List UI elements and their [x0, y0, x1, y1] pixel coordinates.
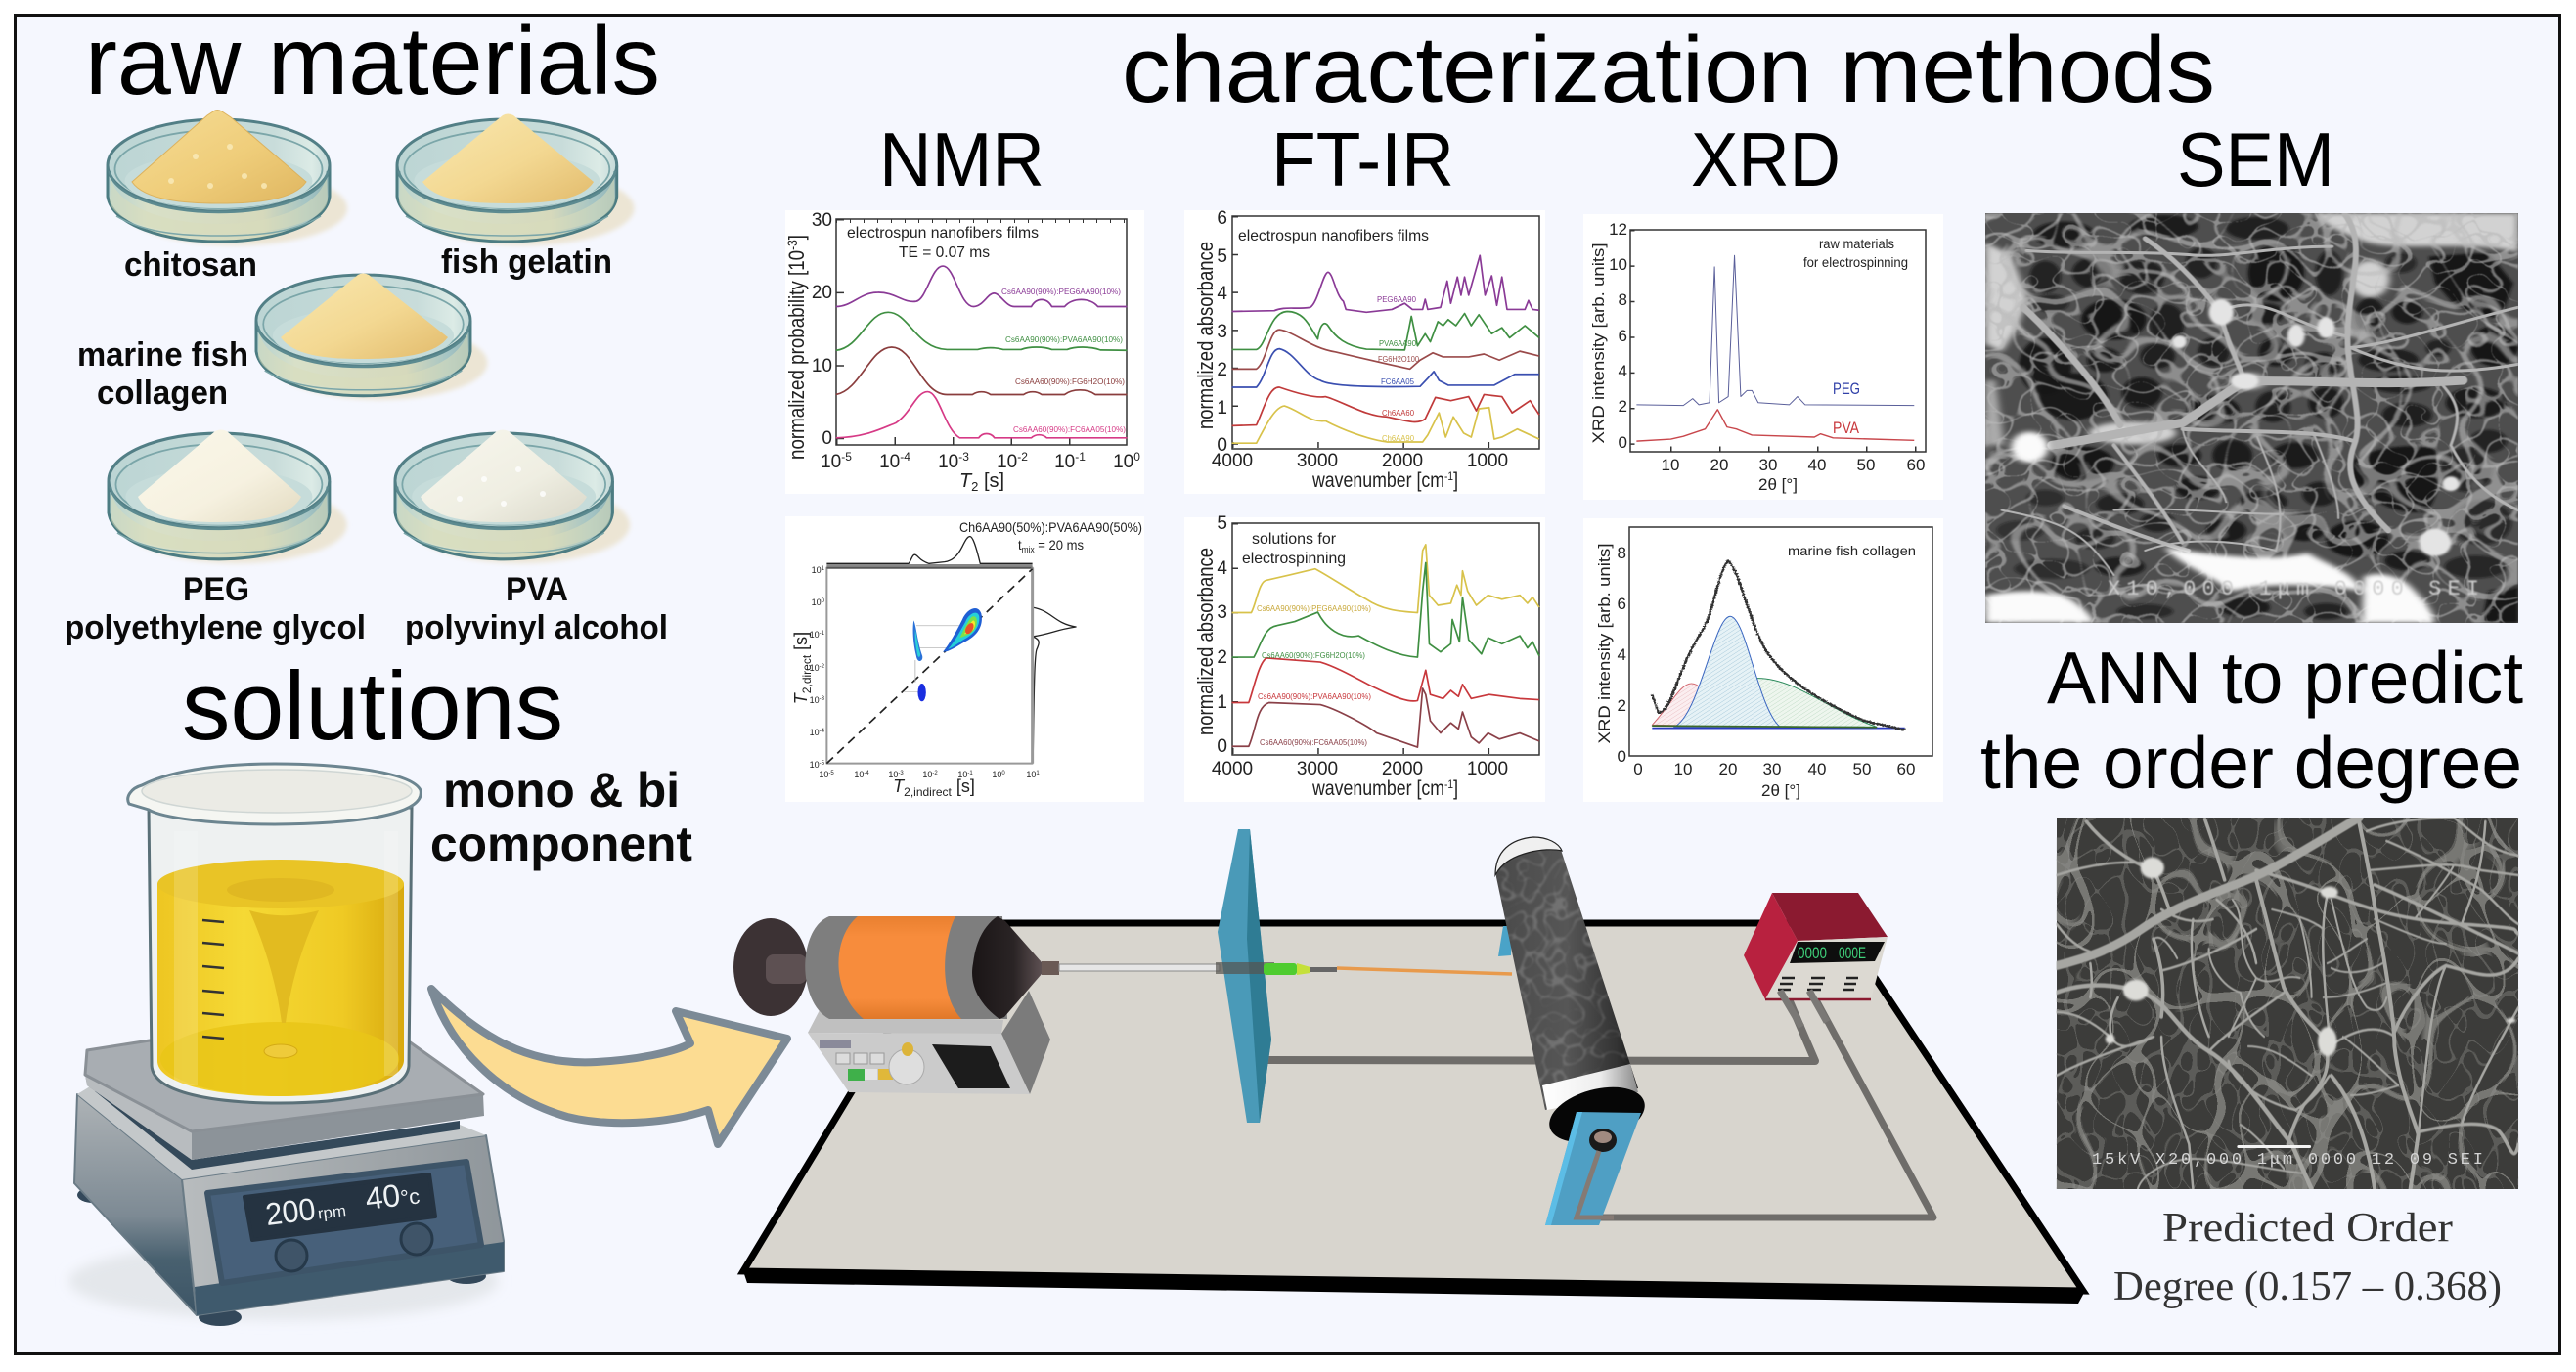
- x tick labels: 10: [821, 452, 841, 472]
- x tick labels: 20: [1719, 760, 1737, 778]
- x tick labels: -4: [864, 771, 869, 776]
- x tick labels: 10: [1662, 456, 1679, 474]
- y tick labels: 2: [1217, 360, 1227, 380]
- y tick labels: -1: [820, 631, 825, 637]
- y tick labels: 1: [1217, 398, 1227, 419]
- current readout: 000E: [1839, 944, 1866, 962]
- voltage readout: 0000: [1798, 944, 1827, 962]
- diagram: electrospinning apparatus: [733, 829, 2084, 1304]
- jet: [1337, 968, 1512, 974]
- x tick labels: 60: [1907, 456, 1925, 474]
- secondary fibre mesh: [2057, 818, 2518, 1189]
- chart: NMR 2D T2-T2 exchange map: [785, 516, 1144, 802]
- scale bar: [2239, 1145, 2310, 1148]
- caption: predicted order degree: [2113, 1206, 2502, 1309]
- y tick labels: 0: [822, 428, 832, 449]
- annotation: raw materials: raw materials: [1819, 236, 1894, 251]
- cross-peak guides: [904, 626, 965, 691]
- y axis title: normalized absorbance: [1193, 548, 1218, 735]
- x tick labels: -4: [900, 450, 910, 464]
- x axis title: T: [959, 470, 973, 492]
- x axis title: 2θ [°]: [1761, 781, 1800, 800]
- label: mono and bi component: component: [430, 817, 692, 871]
- y tick labels: [812, 210, 832, 449]
- heading: XRD: XRD: [1691, 116, 1841, 202]
- y tick labels: 6: [1619, 327, 1627, 345]
- y tick labels: 10: [1609, 255, 1627, 274]
- series labels: FG6H2O100: [1378, 354, 1419, 364]
- y tick labels: 10: [810, 663, 820, 673]
- x tick labels: 3000: [1297, 759, 1338, 779]
- rear collector bracket: [1498, 926, 1512, 956]
- ground wires: [1267, 993, 1933, 1217]
- y tick labels: 10: [810, 760, 820, 770]
- series labels: Cs6AA60(90%):FC6AA05(10%): [1013, 424, 1126, 434]
- x tick labels: 50: [1853, 760, 1871, 778]
- y axis title: XRD intensity [arb. units]: [1589, 243, 1608, 444]
- x tick labels: 60: [1897, 760, 1915, 778]
- y tick labels: 2: [1619, 397, 1627, 416]
- knob left: [276, 1240, 307, 1271]
- y tick labels: 10: [810, 695, 820, 705]
- y tick labels: 10: [812, 597, 822, 607]
- x axis title: ]: [1453, 469, 1458, 492]
- series labels: Cs6AA60(90%):FG6H2O(10%): [1015, 376, 1125, 386]
- caption: predicted order degree: Predicted Order: [2162, 1206, 2453, 1251]
- x tick labels: -5: [841, 450, 852, 464]
- x tick labels: [1633, 760, 1915, 778]
- label: marine fish collagen: collagen: [97, 375, 228, 412]
- x tick labels: -3: [898, 771, 904, 776]
- direction pad: [889, 1049, 924, 1084]
- series labels: PEG6AA90: [1377, 294, 1416, 304]
- y tick labels: 6: [1618, 595, 1626, 613]
- x tick labels: 2000: [1382, 759, 1423, 779]
- small peak: [917, 684, 926, 701]
- x axis title: [s]: [952, 776, 975, 796]
- y tick labels: 30: [812, 210, 832, 231]
- light regions: [1985, 213, 2518, 445]
- x tick labels: 0: [1633, 760, 1643, 778]
- annotation: electrospinning: electrospinning: [1242, 551, 1346, 567]
- keypad: [836, 1053, 884, 1064]
- label: PEG polyethylene glycol: polyethylene glycol: [65, 609, 366, 646]
- title: characterization methods: characterization methods: [1122, 18, 2215, 122]
- label: PVA polyvinyl alcohol: PVA: [506, 571, 568, 608]
- y tick labels: 0: [1217, 435, 1227, 456]
- platform: [743, 923, 2084, 1304]
- y tick labels: 5: [1217, 513, 1227, 534]
- series labels: Cs6AA90(90%):PEG6AA90(10%): [1257, 603, 1371, 613]
- title: raw materials: raw materials: [85, 7, 660, 114]
- x tick labels: -2: [1017, 450, 1028, 464]
- chart: NMR T2 distributions: [784, 210, 1144, 494]
- syringe pump control box: [808, 991, 1050, 1094]
- annotation: for electrospinning: for electrospinning: [1803, 254, 1908, 270]
- x tick labels: 30: [1763, 760, 1781, 778]
- chart: XRD raw materials: [1583, 214, 1943, 500]
- x axis title: -1: [1444, 777, 1453, 791]
- y tick labels: 2: [1618, 696, 1626, 715]
- y tick labels: 8: [1618, 544, 1626, 562]
- nozzle: [1042, 961, 1059, 975]
- x tick labels: 10: [879, 452, 900, 472]
- x tick labels: 1000: [1467, 759, 1508, 779]
- y tick labels: 2: [1217, 647, 1227, 668]
- y tick labels: 1: [1217, 692, 1227, 713]
- x tick labels: 1000: [1467, 451, 1508, 471]
- panel: raw material dishes: [65, 110, 668, 646]
- y tick labels: [1217, 208, 1227, 456]
- x tick labels: 10: [888, 770, 898, 779]
- x tick labels: 40: [1808, 456, 1826, 474]
- y tick labels: -2: [820, 664, 825, 670]
- x tick labels: 10: [997, 452, 1017, 472]
- micrograph caption: 15kV X20,000 1μm 0000 12 09 SEI: [2092, 1151, 2483, 1170]
- y tick labels: 6: [1217, 208, 1227, 229]
- annotation: electrospun nanofibers films: [847, 225, 1039, 242]
- micrograph caption: X10,000 1μm 0000 SEI: [2108, 577, 2479, 601]
- title: solutions: solutions: [182, 651, 563, 760]
- y axis title: -3: [784, 240, 800, 250]
- syringe barrel: [805, 916, 1042, 1019]
- pump screen: [932, 1044, 1010, 1088]
- chart: FT-IR solutions for electrospinning: [1184, 513, 1545, 802]
- x tick labels: [819, 770, 1040, 779]
- y tick labels: 4: [1619, 362, 1627, 380]
- heading: ANN to predict the order degree: the order degree: [1980, 722, 2522, 804]
- mixing time annotation: t: [1018, 537, 1022, 553]
- collector roller: [1494, 836, 1645, 1141]
- barcode: [820, 1040, 851, 1048]
- annotation: electrospun nanofibers films: [1238, 228, 1429, 244]
- y tick labels: [1609, 220, 1627, 452]
- x tick labels: [1212, 451, 1508, 471]
- spinneret: [1264, 963, 1337, 975]
- x axis title: 2,indirect: [904, 785, 952, 799]
- fibre coating: [1500, 851, 1637, 1104]
- roller end: [1543, 1078, 1651, 1152]
- x tick labels: 10: [938, 452, 958, 472]
- label: mono and bi component: mono & bi: [443, 763, 680, 818]
- display: 200 rpm: [263, 1187, 347, 1232]
- y tick labels: -3: [820, 696, 825, 702]
- x tick labels: [1662, 456, 1925, 474]
- x axis title: -1: [1444, 469, 1453, 483]
- series labels: [1001, 287, 1126, 434]
- x tick labels: 0: [1001, 771, 1005, 776]
- series label: PEG: PEG: [1833, 379, 1860, 398]
- y tick labels: -5: [820, 761, 825, 767]
- x axis title: 2: [971, 479, 978, 494]
- y tick labels: 0: [1618, 747, 1626, 766]
- chart: XRD marine fish collagen: [1583, 518, 1943, 802]
- y tick labels: 4: [1618, 645, 1626, 664]
- x tick labels: -3: [958, 450, 969, 464]
- y tick labels: 4: [1217, 558, 1227, 579]
- annotation: solutions for: solutions for: [1252, 531, 1337, 548]
- cone: [972, 916, 1042, 1019]
- display: 200 rpm: 200: [263, 1191, 317, 1232]
- label: marine fish collagen: marine fish: [77, 336, 248, 374]
- image: SEM micrograph 10,000x: [1985, 213, 2518, 623]
- label: PVA polyvinyl alcohol: polyvinyl alcohol: [405, 609, 668, 646]
- heading: NMR: NMR: [879, 116, 1044, 202]
- diffractograms: [1636, 255, 1914, 441]
- y axis title: 2,direct: [800, 654, 814, 693]
- mixing time annotation: mix: [1022, 545, 1035, 554]
- x tick labels: -1: [967, 771, 973, 776]
- diagonal: [826, 569, 1033, 764]
- y axis title: [s]: [791, 632, 811, 655]
- orange band: [838, 916, 961, 1019]
- icon: beaker with yellow solution: [128, 764, 421, 1103]
- x tick labels: 10: [854, 770, 864, 779]
- y tick labels: 12: [1609, 220, 1627, 239]
- yellow knob: [902, 1042, 913, 1056]
- label: fish gelatin: fish gelatin: [441, 243, 612, 281]
- x axis title: 2θ [°]: [1758, 475, 1798, 494]
- x axis title: ]: [1453, 777, 1458, 800]
- x tick labels: [1212, 759, 1508, 779]
- icon: fish gelatin dish: [397, 113, 635, 245]
- y tick labels: [1217, 513, 1227, 757]
- arrow: solution to electrospinning: [431, 989, 787, 1144]
- plunger disc: [733, 918, 808, 1016]
- x tick labels: 40: [1808, 760, 1826, 778]
- roller top cap: [1495, 837, 1562, 875]
- fine fibre mesh: [1985, 213, 2518, 623]
- y tick labels: 5: [1217, 246, 1227, 267]
- off-diagonal peak: [913, 620, 922, 661]
- y tick labels: 10: [810, 728, 820, 737]
- series labels: Ch6AA90: [1382, 433, 1414, 443]
- blue plate: [1216, 829, 1274, 1123]
- label: mono and bi component: [430, 763, 692, 871]
- x tick labels: 10: [819, 770, 828, 779]
- y tick labels: 3: [1217, 602, 1227, 623]
- series labels: PVA6AA90: [1379, 338, 1416, 348]
- x tick labels: 3000: [1297, 451, 1338, 471]
- x tick labels: 10: [1113, 452, 1133, 472]
- plunger rod: [766, 954, 807, 984]
- x tick labels: 20: [1710, 456, 1728, 474]
- image: SEM micrograph 20,000x: [2057, 818, 2518, 1189]
- y axis title: normalized absorbance: [1193, 242, 1218, 429]
- y tick labels: [1618, 544, 1626, 766]
- x tick labels: 4000: [1212, 759, 1253, 779]
- series labels: Cs6AA60(90%):FG6H2O(10%): [1262, 650, 1365, 660]
- y tick labels: 10: [812, 565, 822, 575]
- bright nodes: [2172, 299, 2460, 556]
- heading: ANN to predict the order degree: ANN to predict: [2047, 637, 2523, 719]
- stirrer feet: [77, 1187, 486, 1326]
- main peak contours: [943, 608, 982, 652]
- x tick labels: 2000: [1382, 451, 1423, 471]
- y tick labels: 0: [822, 598, 825, 604]
- series labels: FC6AA05: [1381, 376, 1414, 386]
- x axis title: T: [893, 776, 906, 796]
- label: marine fish collagen: [77, 336, 248, 412]
- x axis title: wavenumber [cm: [1312, 469, 1469, 492]
- series labels: Cs6AA90(90%):PEG6AA90(10%): [1001, 287, 1121, 296]
- series label: PVA: PVA: [1833, 419, 1860, 437]
- series labels: Cs6AA90(90%):PVA6AA90(10%): [1005, 334, 1123, 344]
- annotation: marine fish collagen: [1788, 543, 1916, 558]
- charged bright areas: [1985, 432, 2435, 623]
- x tick labels: -1: [1075, 450, 1086, 464]
- x tick labels: 10: [1026, 770, 1036, 779]
- projections: [826, 537, 1033, 563]
- display: 40 C: 40°c: [363, 1174, 422, 1217]
- fibre network: [2002, 214, 2518, 575]
- collector bracket: [1545, 1112, 1641, 1225]
- chart: FT-IR electrospun nanofibers films: [1184, 208, 1545, 494]
- cable stubs: [1780, 991, 1827, 1027]
- exchange-map annotation: Ch6AA90(50%):PVA6AA90(50%): [959, 519, 1142, 535]
- icon: chitosan dish: [108, 110, 347, 245]
- icon: magnetic stirrer hot plate: [68, 1040, 504, 1326]
- x tick labels: -2: [932, 771, 938, 776]
- series labels: Ch6AA60: [1382, 408, 1414, 418]
- icon: marine fish collagen dish: [256, 274, 487, 400]
- label: PEG polyethylene glycol: [65, 571, 366, 646]
- heading: SEM: SEM: [2177, 116, 2334, 202]
- display: 200 rpm: rpm: [317, 1203, 347, 1223]
- spectra: [1232, 545, 1539, 747]
- y tick labels: [810, 565, 825, 770]
- icon: PEG dish: [109, 430, 347, 563]
- x tick labels: 10: [1054, 452, 1075, 472]
- panel switches: [1778, 978, 1858, 990]
- label: PVA polyvinyl alcohol: [405, 571, 668, 646]
- x tick labels: 1: [1036, 771, 1040, 776]
- series labels: [1377, 294, 1419, 443]
- liquid: [157, 884, 404, 1096]
- y tick labels: 8: [1619, 290, 1627, 309]
- x tick labels: 10: [922, 770, 932, 779]
- x tick labels: 50: [1857, 456, 1875, 474]
- y tick labels: -4: [820, 729, 825, 734]
- heading: ANN to predict the order degree: [1980, 637, 2523, 804]
- x tick labels: [821, 450, 1140, 472]
- series labels: Cs6AA90(90%):PVA6AA90(10%): [1258, 691, 1371, 701]
- y tick labels: 3: [1217, 322, 1227, 342]
- y tick labels: 1: [822, 566, 825, 572]
- y axis title: T: [791, 691, 811, 704]
- y axis title: ]: [784, 235, 809, 240]
- y tick labels: 20: [812, 283, 832, 303]
- y tick labels: 10: [810, 630, 820, 640]
- knob right: [401, 1223, 432, 1255]
- x axis title: [s]: [978, 470, 1004, 492]
- thick fibres: [2057, 818, 2359, 966]
- dark pores: [1996, 215, 2518, 623]
- y tick labels: 0: [1619, 433, 1627, 452]
- deconvolved peaks: [1652, 560, 1905, 730]
- label: chitosan: chitosan: [124, 246, 257, 284]
- y tick labels: 0: [1217, 736, 1227, 757]
- background fibre mesh: [2057, 818, 2518, 1189]
- x tick labels: -5: [828, 771, 834, 776]
- x tick labels: 30: [1759, 456, 1777, 474]
- high-voltage power supply: [1744, 893, 1888, 999]
- graduation ticks: [202, 920, 224, 1039]
- icon: PVA dish: [395, 430, 630, 563]
- spectra: [1232, 255, 1539, 443]
- curves: [836, 266, 1127, 438]
- label: PEG polyethylene glycol: PEG: [183, 571, 249, 608]
- x axis title: wavenumber [cm: [1312, 777, 1469, 800]
- x tick labels: 10: [1674, 760, 1692, 778]
- x tick labels: 4000: [1212, 451, 1253, 471]
- series labels: Cs6AA60(90%):FC6AA05(10%): [1260, 737, 1367, 747]
- x tick labels: 10: [992, 770, 1001, 779]
- y tick labels: 4: [1217, 284, 1227, 304]
- x tick labels: 10: [957, 770, 967, 779]
- white band: [1542, 1064, 1638, 1110]
- coarse fibre mesh: [1985, 213, 2518, 623]
- bright junction beads: [2106, 857, 2515, 1056]
- x tick labels: 0: [1133, 450, 1140, 464]
- annotation: TE: TE = 0.07 ms: [899, 244, 990, 261]
- mixing time annotation: = 20 ms: [1035, 537, 1084, 553]
- y axis title: normalized probability [10: [784, 214, 809, 460]
- y tick labels: 10: [812, 356, 832, 376]
- heading: FT-IR: FT-IR: [1271, 116, 1454, 202]
- series labels: [1257, 603, 1371, 747]
- feed tube: [1059, 964, 1220, 971]
- y axis title: XRD intensity [arb. units]: [1595, 544, 1614, 743]
- vortex: [249, 910, 319, 1023]
- caption: predicted order degree: Degree (0.157 – 0.368): [2113, 1264, 2502, 1309]
